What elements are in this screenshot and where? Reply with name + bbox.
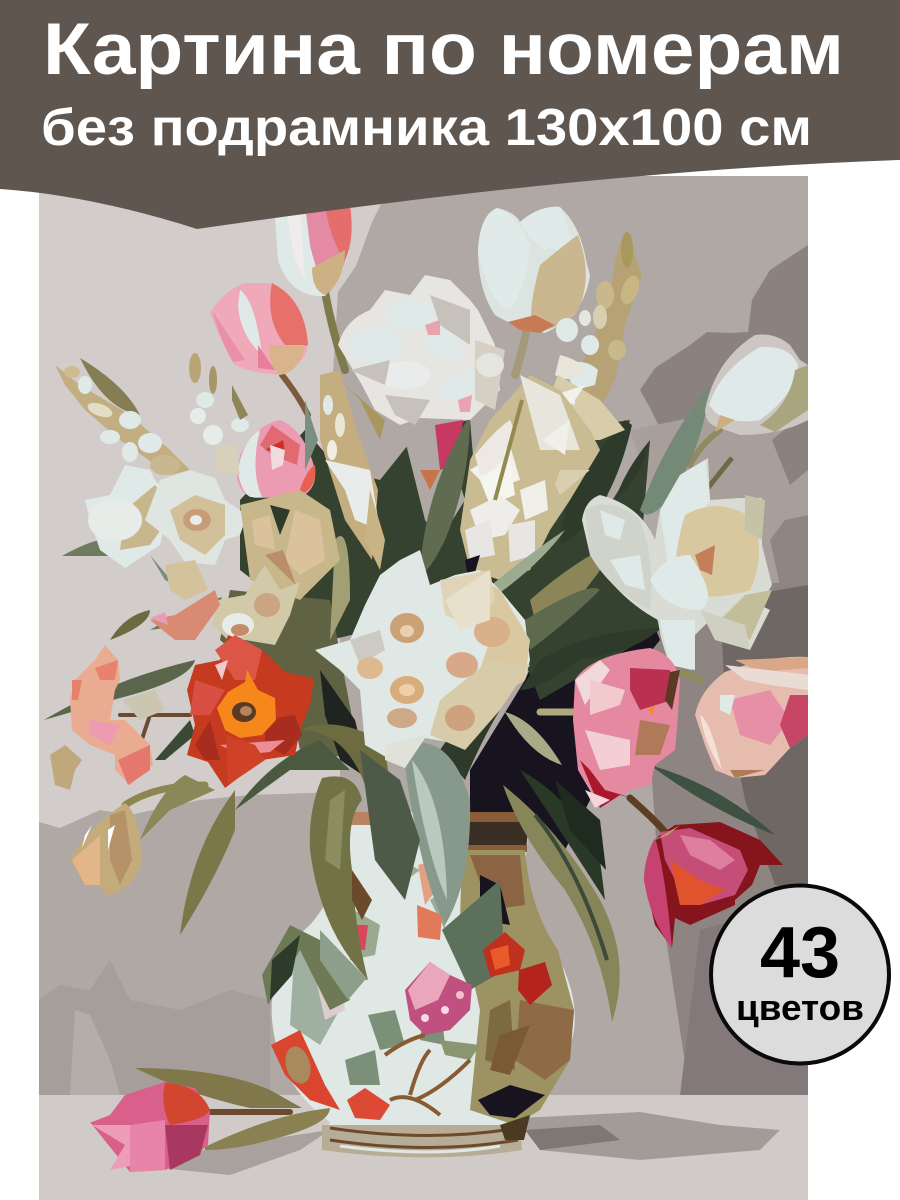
- flower: central white narcissus cluster: [315, 550, 530, 768]
- flower: red flower with orange centre: [187, 635, 314, 788]
- flower: top pink tulip: [274, 205, 352, 296]
- header banner: [0, 0, 900, 229]
- badge number: 43: [760, 913, 840, 993]
- badge: colour count: [711, 886, 889, 1064]
- vase green sprays: [290, 950, 338, 1045]
- flower: white tulip right: [705, 334, 808, 435]
- flower: left white daffodils: [85, 465, 340, 600]
- white hyacinth cluster: [338, 275, 505, 440]
- flower: big white daffodil: [582, 458, 772, 670]
- flower sprigs: left buds: [55, 353, 385, 570]
- flower: pink peony tulip: [573, 648, 680, 808]
- subtitle: без подрамника 130х100 см: [41, 99, 812, 157]
- flower: pink tulip left: [210, 283, 308, 375]
- flower: peach tulip right: [695, 657, 810, 778]
- flower: closed bud left: [70, 803, 142, 897]
- flower: cream daffodil: [150, 565, 300, 645]
- vase pink blossom: [405, 962, 472, 1035]
- vase branches: [385, 1035, 470, 1115]
- fallen tulip with leaves: [90, 1068, 330, 1172]
- white small hyacinth middle: [460, 375, 600, 600]
- flower sprigs: right buds: [554, 230, 642, 440]
- leaves over vase: [262, 742, 620, 1022]
- flower: white tulip top: [478, 207, 590, 333]
- title: Картина по номерам: [43, 9, 844, 90]
- vase red blossoms: [483, 932, 525, 977]
- vase: [271, 812, 575, 1158]
- vase rim band: [468, 822, 528, 845]
- flower: pink rose tulip: [237, 420, 315, 498]
- painting: flowers in a vase: [39, 176, 810, 1200]
- flower: dark pink tulip: [644, 822, 783, 948]
- painting background: [39, 176, 808, 1200]
- leaves back layer: [44, 358, 775, 935]
- dark foliage mass behind bouquet: [220, 420, 660, 860]
- flower: salmon flower left: [50, 645, 165, 790]
- badge label: цветов: [736, 987, 864, 1028]
- vase right brown neck: [460, 850, 574, 1125]
- stems: [115, 292, 720, 1112]
